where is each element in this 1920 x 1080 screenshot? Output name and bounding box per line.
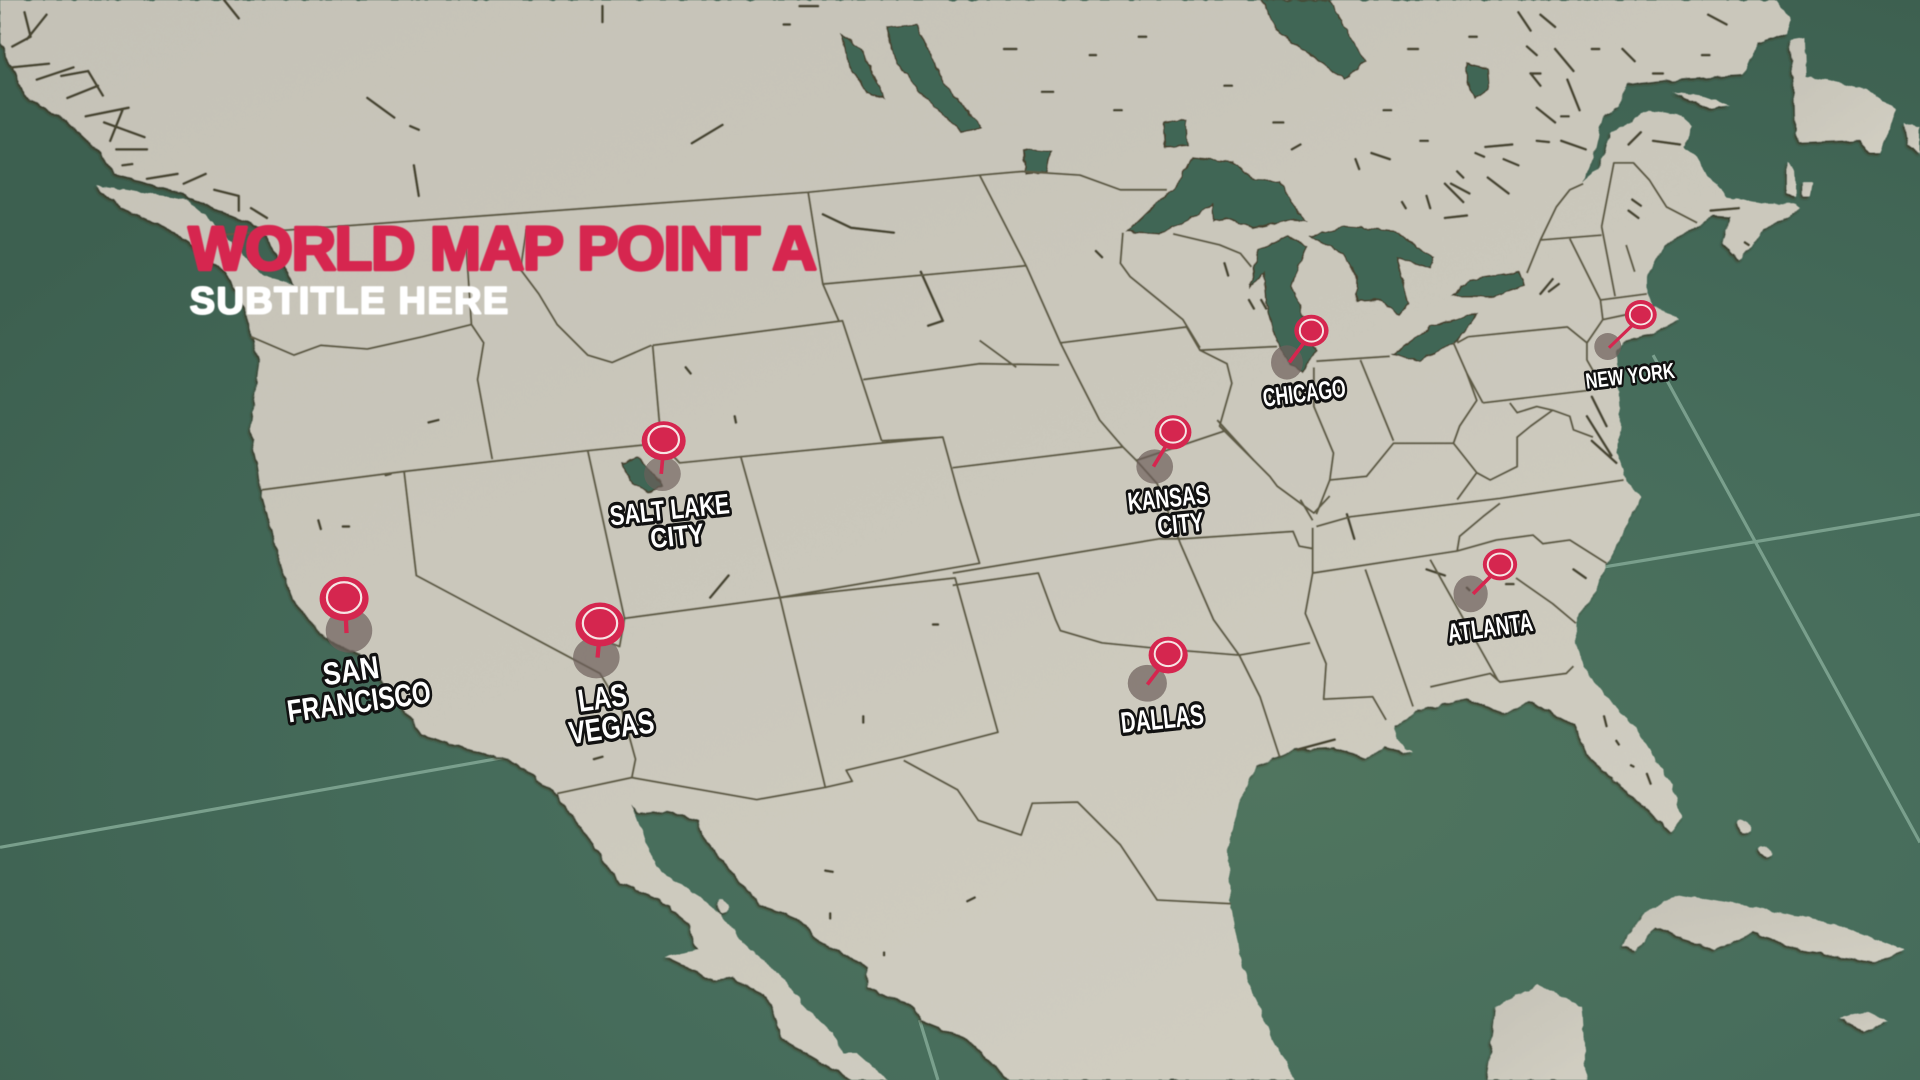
label: Dallas: DALLAS bbox=[1119, 698, 1205, 740]
large lakes bbox=[622, 0, 1524, 492]
label: San Francisco: FRANCISCO bbox=[285, 674, 433, 729]
label: Salt Lake City: SALT LAKE bbox=[608, 488, 731, 531]
graticule lines bbox=[0, 355, 1920, 1080]
label: Kansas City: CITY bbox=[1156, 507, 1205, 541]
label: Salt Lake City: CITY bbox=[649, 518, 706, 554]
pin: New York bbox=[1594, 300, 1657, 360]
pin: Dallas bbox=[1128, 637, 1188, 702]
pin: Atlanta bbox=[1453, 549, 1517, 612]
label: Chicago: CHICAGO bbox=[1261, 375, 1347, 413]
pin: Chicago bbox=[1271, 315, 1329, 380]
state and national borders bbox=[218, 163, 1697, 904]
label: San Francisco: SAN bbox=[320, 649, 381, 692]
label: New York: NEW YORK bbox=[1584, 358, 1676, 394]
label: Las Vegas: LAS bbox=[576, 676, 629, 719]
label: Atlanta: ATLANTA bbox=[1446, 607, 1535, 649]
label: Las Vegas: VEGAS bbox=[567, 703, 656, 751]
pin: Kansas City bbox=[1136, 415, 1191, 484]
pin: San Francisco bbox=[320, 577, 372, 653]
pin: Salt Lake City bbox=[642, 421, 686, 491]
pin: Las Vegas bbox=[573, 602, 624, 678]
subtitle: SUBTITLE HERE bbox=[190, 280, 508, 322]
fjords and scattered lake squiggles bbox=[12, 0, 1749, 955]
title: WORLD MAP POINT A bbox=[189, 214, 817, 282]
label: Kansas City: KANSAS bbox=[1126, 479, 1210, 517]
